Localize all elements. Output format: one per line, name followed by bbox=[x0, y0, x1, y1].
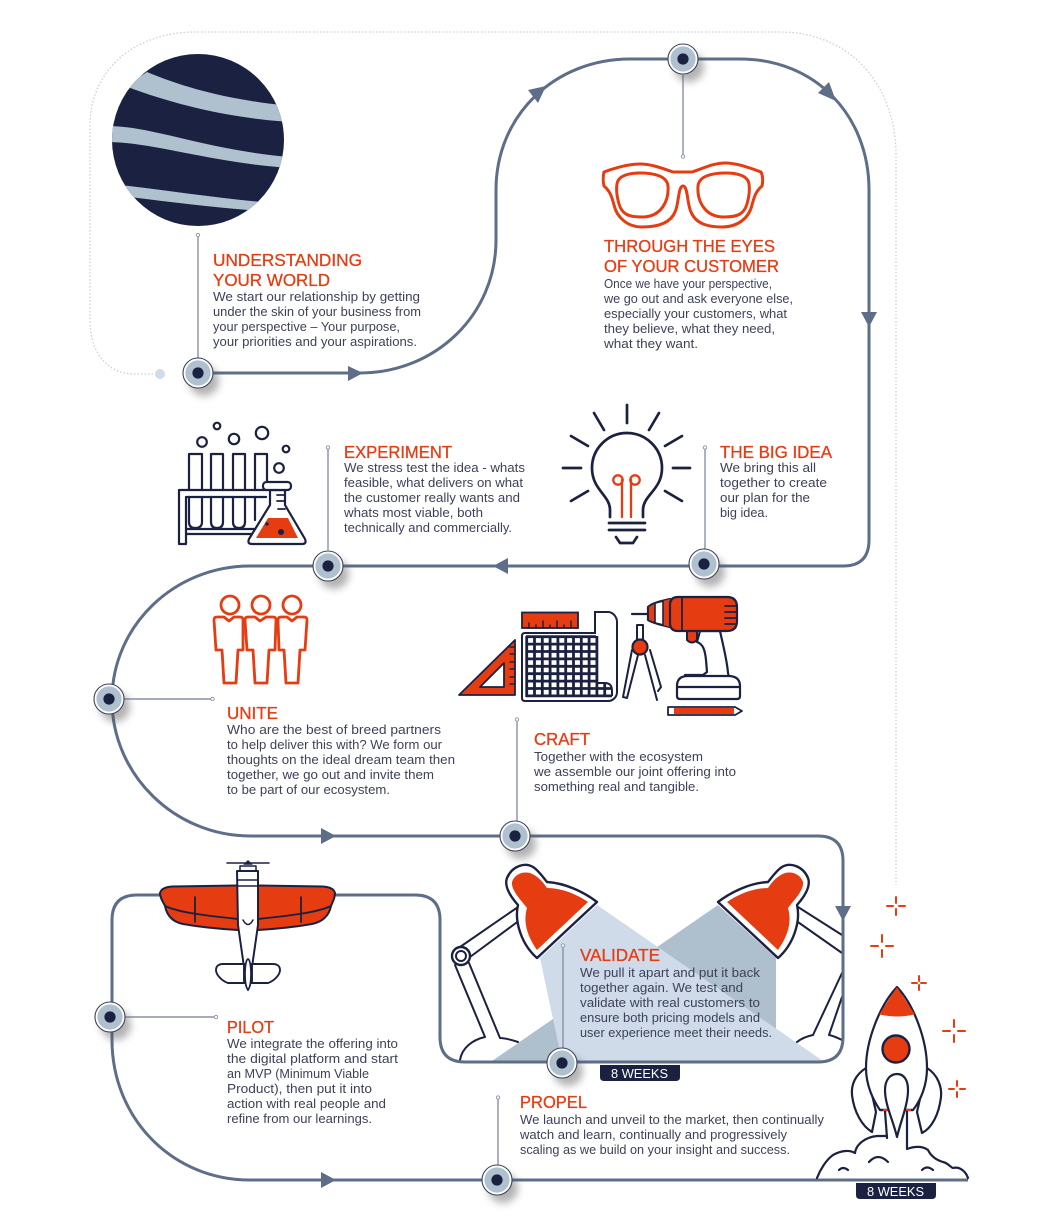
body text: our plan for the bbox=[720, 490, 810, 505]
body text: we go out and ask everyone else, bbox=[603, 291, 793, 306]
body text: watch and learn, continually and progressively bbox=[519, 1127, 788, 1142]
icon: test tubes and flask bbox=[179, 423, 306, 544]
sparkles bbox=[871, 897, 965, 1097]
drill bbox=[632, 613, 648, 615]
body text: an MVP (Minimum Viable bbox=[227, 1066, 369, 1081]
cloud bbox=[817, 1136, 968, 1178]
icon: plane bbox=[160, 861, 335, 990]
body text: Once we have your perspective, bbox=[604, 276, 772, 291]
heading: THROUGH THE EYES bbox=[604, 236, 775, 256]
body text: refine from our learnings. bbox=[227, 1111, 372, 1126]
icon: three people bbox=[214, 596, 307, 683]
connector bbox=[124, 698, 211, 700]
fins bbox=[852, 1068, 876, 1132]
connector bbox=[562, 947, 564, 1048]
body text: especially your customers, what bbox=[604, 306, 787, 321]
body text: We stress test the idea - whats bbox=[344, 460, 525, 475]
body text: thoughts on the ideal dream team then bbox=[227, 752, 455, 767]
heading: OF YOUR CUSTOMER bbox=[604, 256, 779, 276]
light beam front bbox=[540, 905, 823, 1061]
icon: light bulb bbox=[563, 405, 690, 543]
panel: understanding your world bbox=[105, 54, 421, 358]
body text: your priorities and your aspirations. bbox=[213, 334, 417, 349]
body text: We start our relationship by getting bbox=[213, 289, 420, 304]
body text: ensure both pricing models and bbox=[580, 1010, 760, 1025]
nose cone bbox=[880, 988, 914, 1016]
heading: EXPERIMENT bbox=[344, 442, 452, 462]
body text: what they want. bbox=[603, 336, 698, 351]
main journey path bbox=[112, 59, 968, 1180]
panel: propel bbox=[496, 897, 968, 1199]
body text: technically and commercially. bbox=[344, 520, 512, 535]
light beam back bbox=[492, 905, 776, 1061]
body text: whats most viable, both bbox=[343, 505, 483, 520]
body text: Together with the ecosystem bbox=[534, 749, 703, 764]
body bbox=[866, 987, 927, 1110]
set square bbox=[459, 640, 515, 695]
body text: We launch and unveil to the market, then continually bbox=[520, 1112, 825, 1127]
left lamp bbox=[452, 865, 597, 1060]
panel: through the eyes of your customer bbox=[603, 75, 793, 351]
body text: Who are the best of breed partners bbox=[227, 722, 441, 737]
connector bbox=[327, 449, 329, 550]
compass bbox=[623, 625, 661, 700]
body text: validate with real customers to bbox=[580, 995, 760, 1010]
heading: THE BIG IDEA bbox=[720, 442, 832, 462]
panel: experiment bbox=[179, 423, 525, 550]
heading: YOUR WORLD bbox=[213, 270, 330, 290]
icon: glasses bbox=[603, 163, 763, 227]
connector bbox=[704, 449, 706, 549]
ruler bbox=[522, 612, 578, 628]
heading: UNDERSTANDING bbox=[213, 250, 362, 270]
icon: lamps bbox=[452, 865, 842, 1061]
body text: the digital platform and start bbox=[227, 1051, 398, 1066]
body text: your perspective – Your purpose, bbox=[213, 319, 400, 334]
body text: together again. We test and bbox=[580, 980, 743, 995]
connector bbox=[682, 75, 684, 155]
panel: unite bbox=[124, 596, 455, 797]
badge: 8 weeks: 8 WEEKS bbox=[867, 1185, 924, 1199]
badge: 8 weeks: 8 WEEKS bbox=[611, 1067, 668, 1081]
body text: scaling as we build on your insight and success. bbox=[520, 1142, 790, 1157]
body text: user experience meet their needs. bbox=[580, 1025, 772, 1040]
body text: together, we go out and invite them bbox=[227, 767, 434, 782]
badge: 8 weeks bbox=[600, 1065, 680, 1081]
body text: we assemble our joint offering into bbox=[533, 764, 736, 779]
body text: to help deliver this with? We form our bbox=[227, 737, 443, 752]
heading: CRAFT bbox=[534, 729, 590, 749]
nozzle and flame bbox=[880, 1110, 913, 1148]
connector bbox=[516, 721, 518, 821]
connector bbox=[125, 1016, 215, 1018]
body text: together to create bbox=[720, 475, 827, 490]
body text: they believe, what they need, bbox=[604, 321, 775, 336]
arrows bbox=[321, 82, 877, 1188]
body text: feasible, what delivers on what bbox=[344, 475, 523, 490]
body text: We bring this all bbox=[720, 460, 816, 475]
body text: We integrate the offering into bbox=[227, 1036, 398, 1051]
body text: the customer really wants and bbox=[344, 490, 520, 505]
blueprint bbox=[522, 612, 617, 701]
icon: planet bbox=[105, 54, 290, 226]
body text: big idea. bbox=[720, 505, 768, 520]
right lamp bbox=[718, 865, 842, 1042]
pencil bbox=[668, 707, 742, 715]
body text: something real and tangible. bbox=[534, 779, 699, 794]
body text: We pull it apart and put it back bbox=[580, 965, 761, 980]
badge: 8 weeks bbox=[856, 1183, 936, 1199]
panel: the big idea bbox=[563, 405, 832, 549]
panel: craft bbox=[459, 597, 742, 821]
icon: rocket bbox=[817, 987, 968, 1178]
heading: VALIDATE bbox=[580, 945, 660, 965]
body text: under the skin of your business from bbox=[213, 304, 421, 319]
connector bbox=[497, 1099, 499, 1165]
body text: action with real people and bbox=[227, 1096, 386, 1111]
heading: PILOT bbox=[227, 1017, 274, 1037]
heading: PROPEL bbox=[520, 1092, 587, 1112]
path nodes bbox=[94, 44, 725, 1203]
dotted start path bbox=[90, 32, 896, 885]
heading: UNITE bbox=[227, 703, 278, 723]
connector bbox=[197, 236, 199, 358]
body text: to be part of our ecosystem. bbox=[227, 782, 390, 797]
start dot bbox=[155, 369, 165, 379]
panel: pilot bbox=[125, 861, 398, 1126]
body text: Product), then put it into bbox=[227, 1081, 372, 1096]
panel: validate bbox=[561, 944, 772, 1081]
icon: tools bbox=[459, 597, 742, 715]
